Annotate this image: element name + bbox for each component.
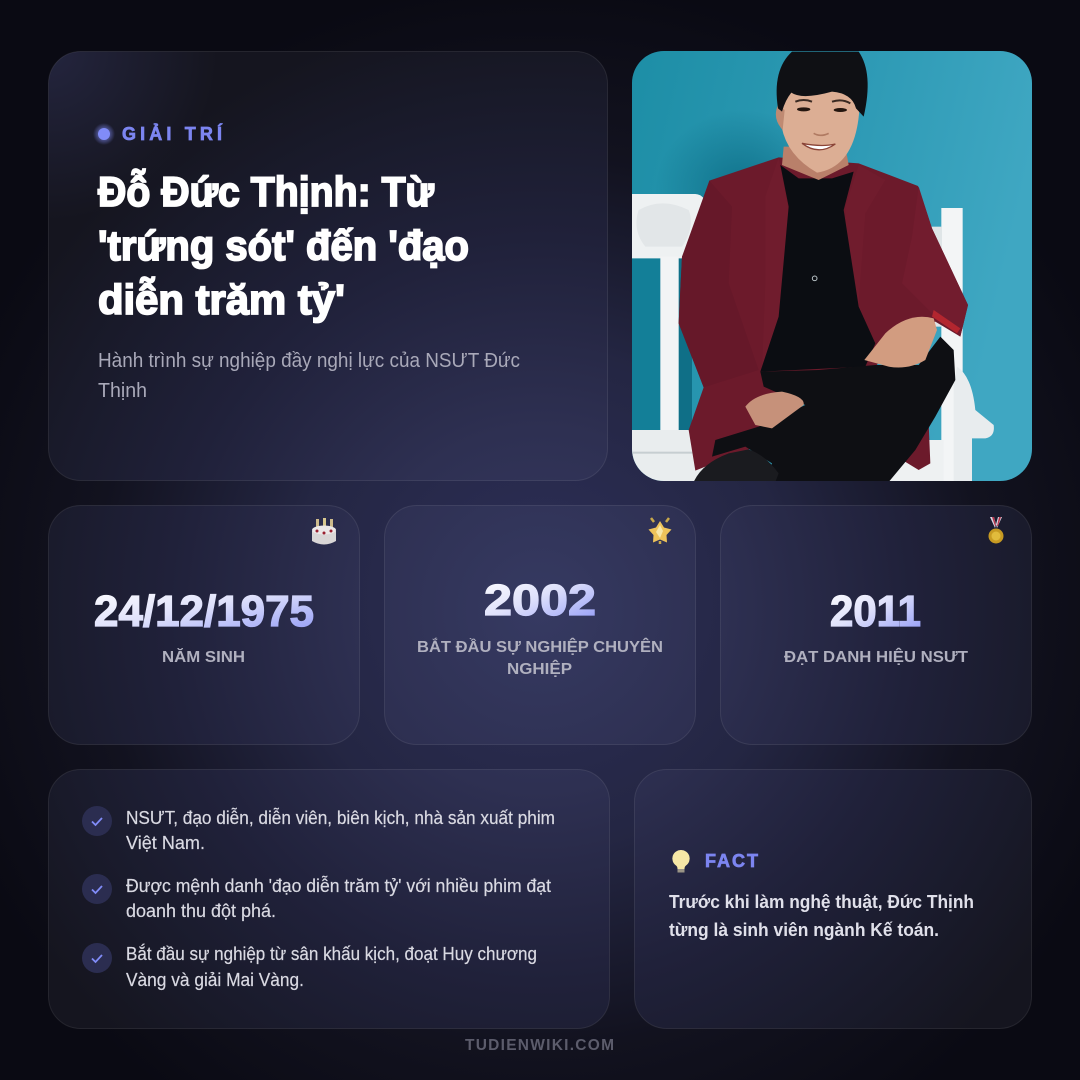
category tag [93, 123, 223, 145]
photo: portrait [632, 51, 1032, 481]
panel: stat award [720, 506, 1032, 744]
shoe [694, 449, 779, 482]
heading [98, 167, 469, 323]
jacket [679, 157, 968, 471]
stat value: 2011 [830, 587, 921, 636]
stat value: 24/12/1975 [94, 587, 314, 636]
category tag: GIẢI TRÍ [122, 123, 223, 144]
fact text: từng là sinh viên ngành Kế toán. [669, 920, 939, 940]
bullet 3 [82, 943, 537, 990]
trousers [712, 337, 955, 482]
bullet 1 [82, 806, 555, 853]
bullet 2 [82, 874, 551, 921]
fact label: FACT [705, 851, 758, 871]
stat label: NĂM SINH [162, 647, 245, 666]
panel: stat career start [384, 506, 696, 744]
hands [745, 392, 804, 428]
bullet 3: Bắt đầu sự nghiệp từ sân khấu kịch, đoạt Huy chương [126, 943, 537, 964]
fact text [669, 892, 974, 940]
neck [782, 147, 849, 180]
footer watermark: TUDIENWIKI.COM [465, 1037, 614, 1054]
heading: 'trứng sót' đến 'đạo [98, 222, 469, 269]
stat label: NGHIỆP [507, 659, 572, 678]
bullet 1: Việt Nam. [126, 833, 205, 853]
heading: Đỗ Đức Thịnh: Từ [98, 167, 435, 215]
icon: birthday cake [312, 518, 336, 544]
subtitle: Thịnh [98, 380, 147, 402]
stat label [417, 637, 663, 678]
panel: fact [634, 770, 1032, 1028]
shirt [760, 165, 875, 372]
stat value: 2002 [484, 576, 596, 625]
panel: stat birth year [48, 506, 360, 744]
panel: key points [48, 770, 610, 1028]
icon: medal [988, 517, 1004, 544]
bullet 3: Vàng và giải Mai Vàng. [126, 970, 304, 990]
bench [632, 194, 707, 258]
head [782, 92, 860, 172]
icon: glowing star [648, 518, 672, 544]
bullet 2: Được mệnh danh 'đạo diễn trăm tỷ' với nhiều phim đạt [126, 875, 551, 896]
panel: title [48, 52, 608, 480]
stat label: BẮT ĐẦU SỰ NGHIỆP CHUYÊN [417, 637, 663, 656]
heading: diễn trăm tỷ' [98, 275, 345, 323]
subtitle: Hành trình sự nghiệp đầy nghị lực của NSƯT Đức [98, 350, 520, 372]
stat label: ĐẠT DANH HIỆU NSƯT [784, 647, 968, 666]
bullet 1: NSƯT, đạo diễn, diễn viên, biên kịch, nhà sản xuất phim [126, 807, 555, 828]
bullet 2: doanh thu đột phá. [126, 901, 276, 921]
subtitle [98, 350, 520, 402]
icon: light bulb [672, 850, 690, 872]
fact text: Trước khi làm nghệ thuật, Đức Thịnh [669, 892, 974, 912]
